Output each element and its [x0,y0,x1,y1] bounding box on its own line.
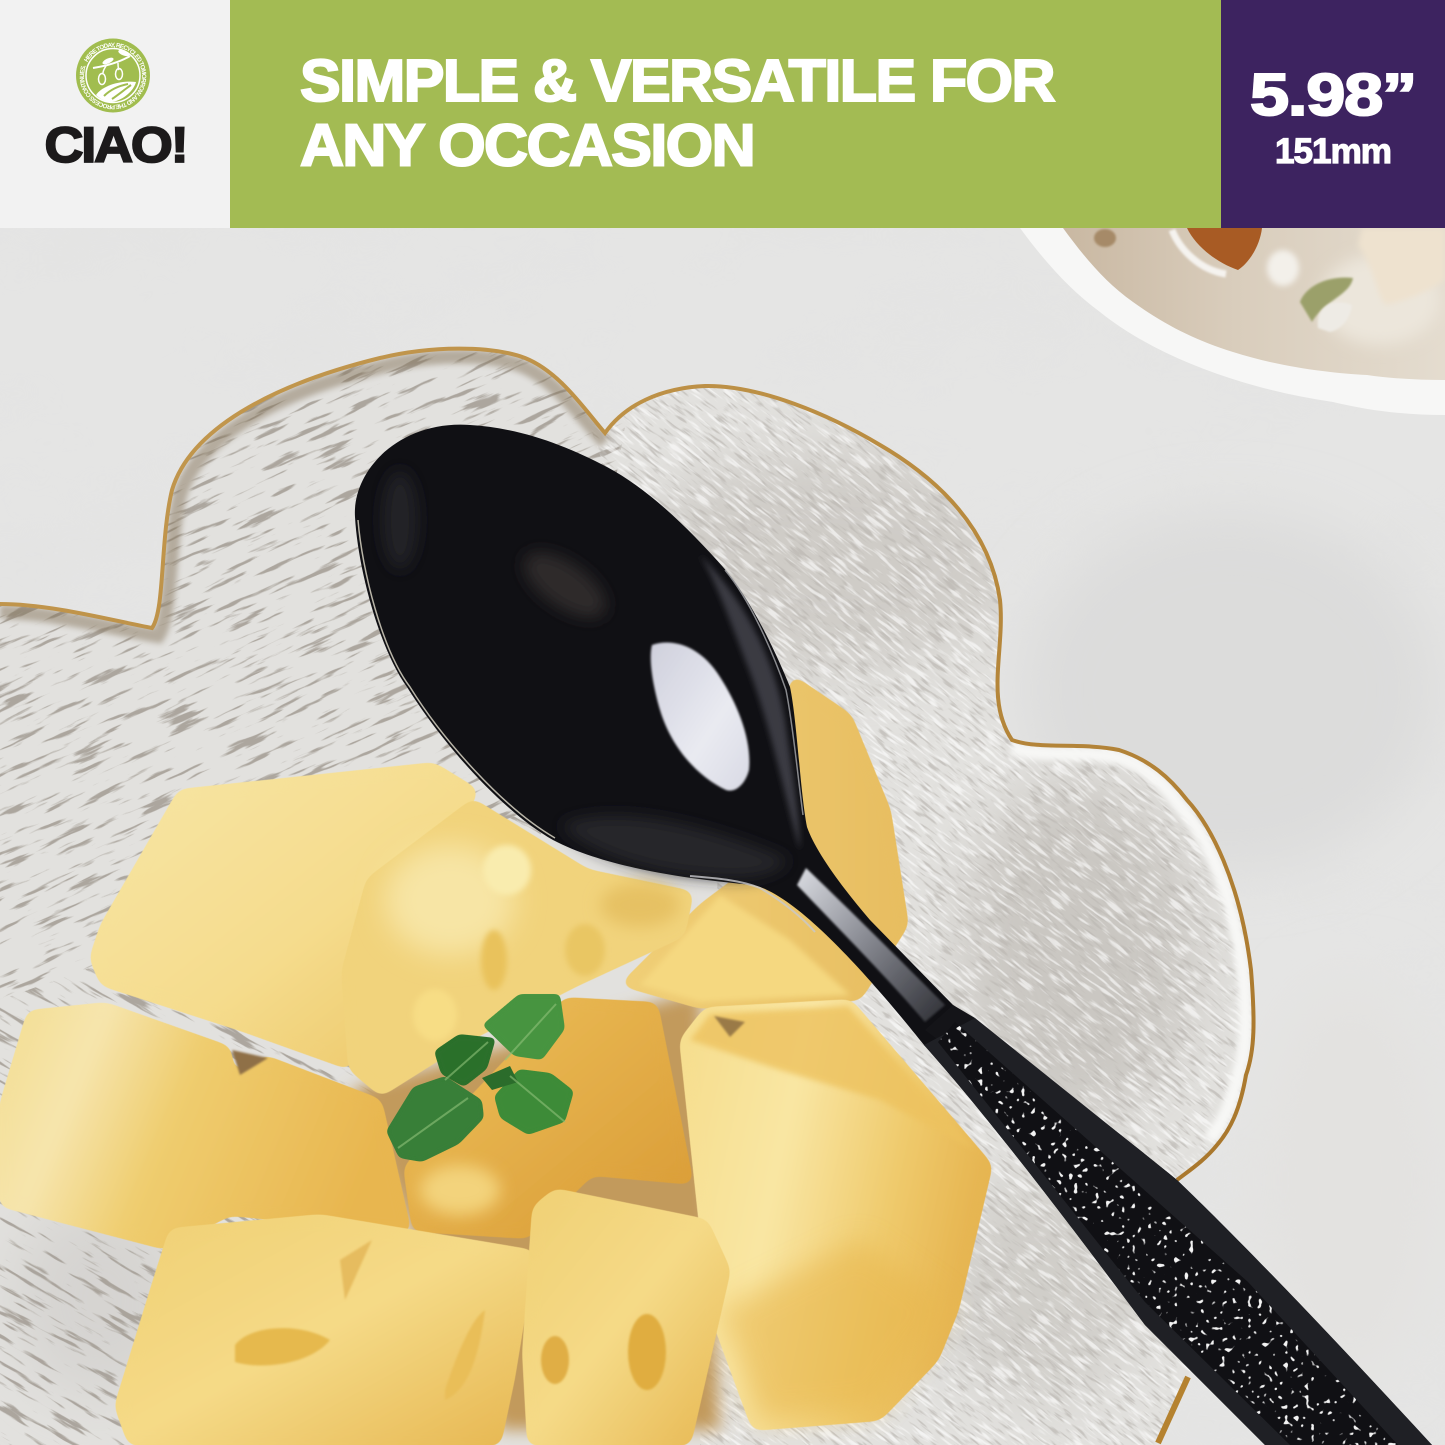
size in millimetres: 151mm [1275,132,1391,171]
photo: white bowl of oatmeal, top right [1020,228,1445,415]
chunk large lower right [680,1000,992,1430]
spoon handle collar [925,1005,975,1045]
glass inner rim shade [0,357,605,636]
spoon reflection: right edge [700,555,800,850]
chunk bottom left [115,1215,535,1445]
spoon rim line [358,520,555,838]
pineapple eyes [232,845,745,1400]
photo: pineapple chunks [0,675,992,1445]
chunk behind spoon [620,675,908,1008]
glass ripple: left side [0,340,640,1000]
chunk left [0,1003,411,1249]
spoon rim line lower [690,876,815,932]
glass ripple: right side dark [592,388,1252,1445]
chunk bottom middle [523,1189,730,1445]
glass ripple: bottom left [0,800,560,1445]
header: green title banner [230,0,1221,228]
title line 1: SIMPLE & VERSATILE FOR [300,48,1055,114]
glass ripple: right side light [596,388,1242,1445]
size in inches: 5.98” [1250,62,1416,128]
chunk lotus slice [342,799,693,1096]
chunk behind spoon: bright face [640,895,850,1002]
chunk middle [404,998,693,1238]
spoon handle texture [924,1015,1432,1445]
photo: scalloped glass bowl [0,340,1270,1445]
header: logo panel [0,0,230,228]
spoon reflection: centre [513,539,617,631]
logo: round olive badge: HERE TODAY, RECYCLED TOMORROW, AND THE PROCESS CONTINUES. [80,42,146,110]
spoon reflection: left [382,470,418,570]
glass inner rim glow [1012,748,1246,1140]
chunk top left [90,763,478,1069]
gold rim lower segment [1158,1377,1188,1443]
spoon rim line right [725,570,803,815]
photo: mint garnish [386,994,574,1162]
gold rim [0,349,1254,1180]
spoon highlight [651,643,749,791]
title line 2: ANY OCCASION [300,112,754,178]
spoon neck highlight [797,868,945,1022]
spoon reflection: lower band [560,816,790,878]
juice shadow under chunks [350,990,720,1430]
photo: black plastic spoon [355,425,1432,1445]
almond [1187,228,1262,270]
header: purple size panel [1221,0,1445,228]
green herb fleck [1300,277,1353,322]
logo: CIAO! wordmark: CIAO! [44,117,186,173]
